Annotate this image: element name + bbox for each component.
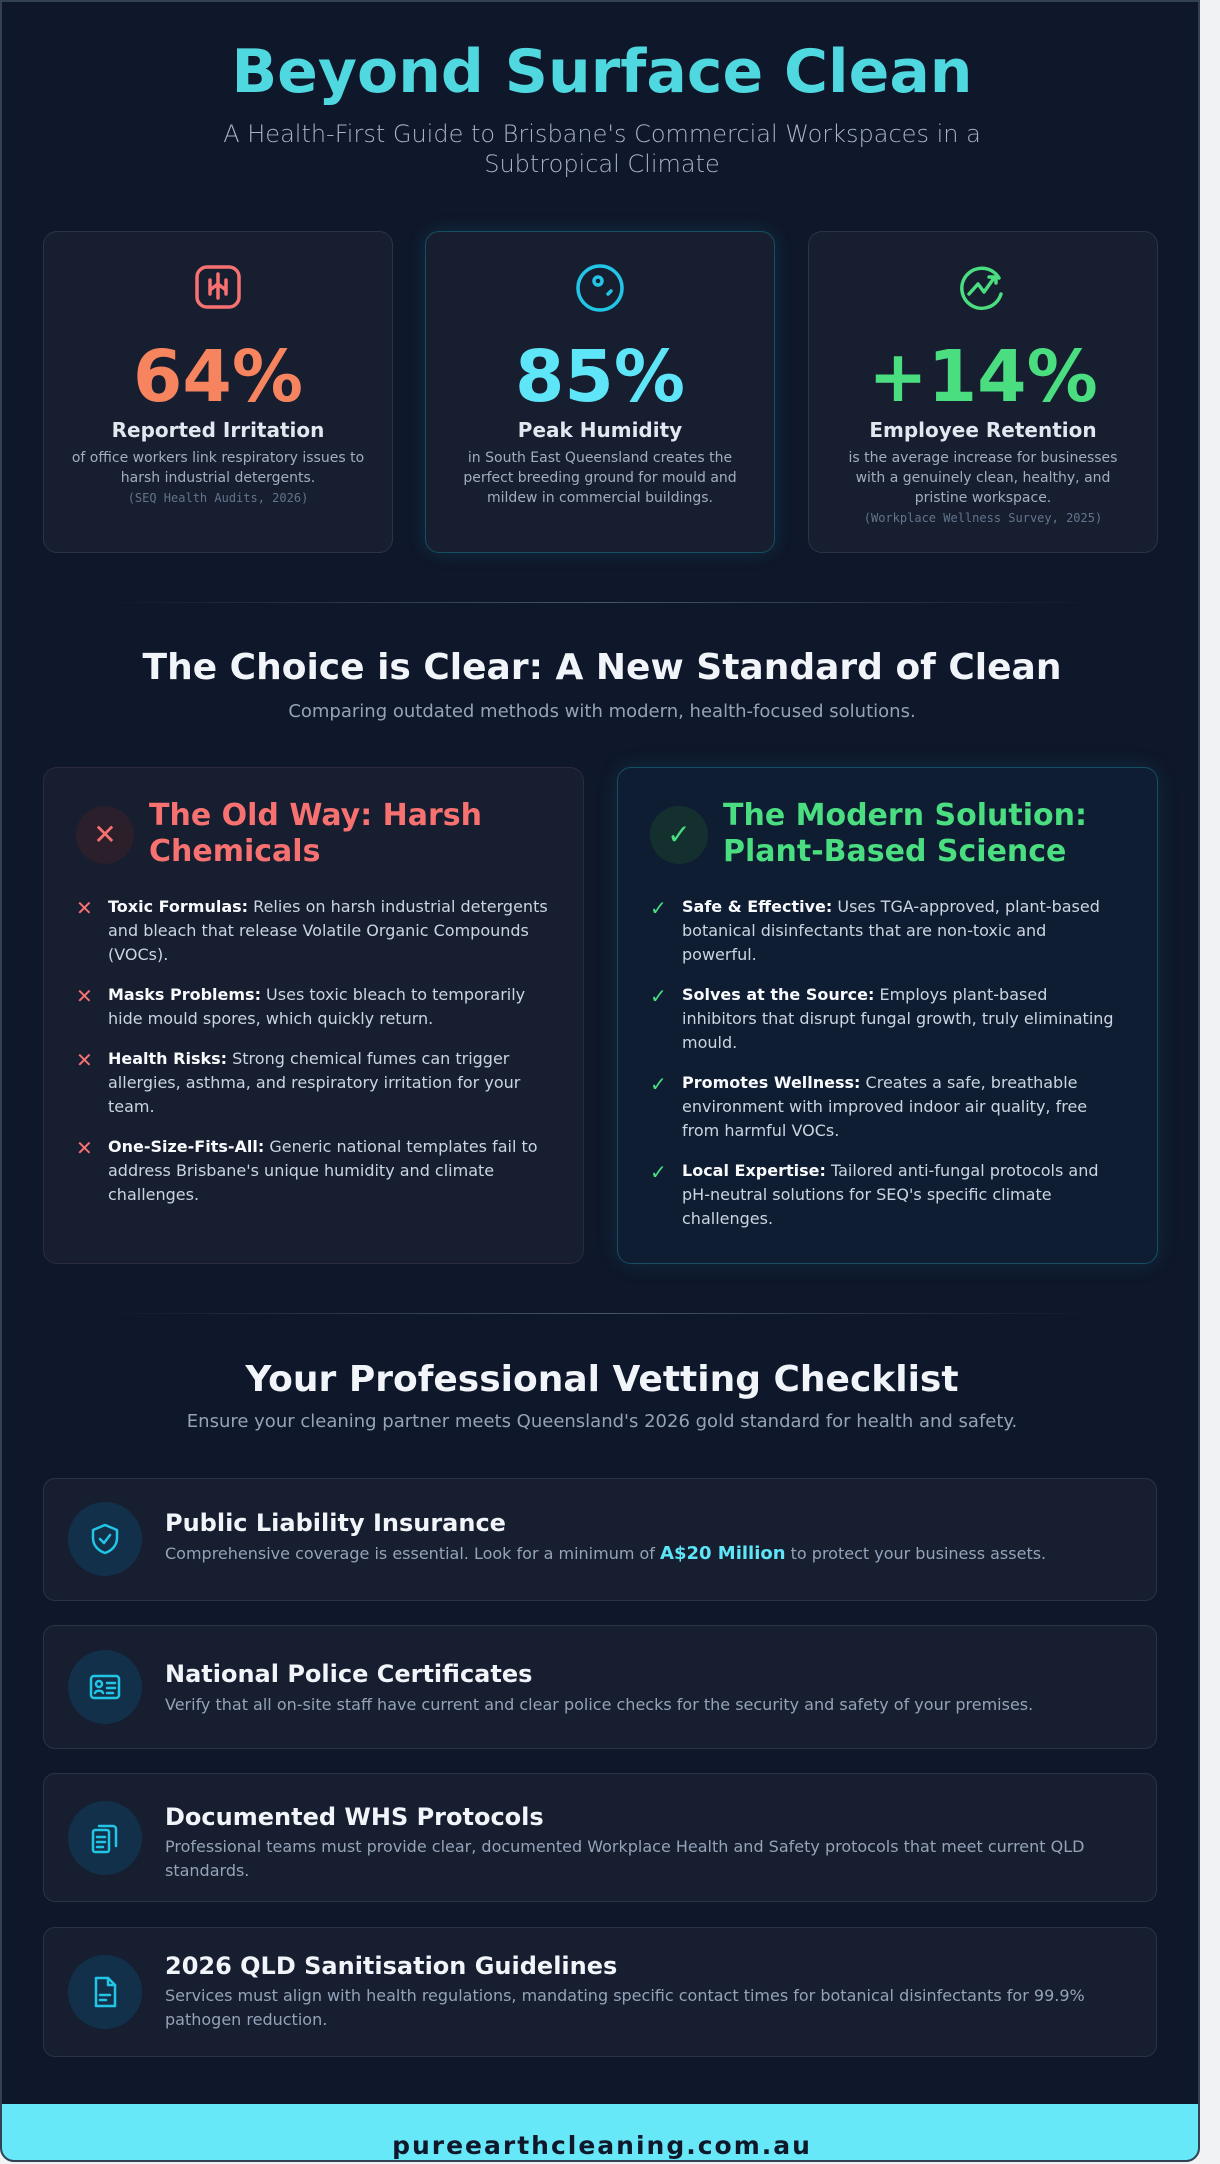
item: ✕ <box>76 984 93 1008</box>
item: Health Risks: Strong chemical fumes can trigger allergies, asthma, and respiratory irritation for your team. <box>108 1049 520 1116</box>
item: Safe & Effective: Uses TGA-approved, plant-based botanical disinfectants that are non-toxic and powerful. <box>682 897 1100 964</box>
old way title <box>149 798 482 869</box>
checklist: sanitisation <box>43 1927 1157 2057</box>
stat card: retention: +14% <box>868 335 1098 418</box>
item: Local Expertise: Tailored anti-fungal protocols and pH-neutral solutions for SEQ's specific climate challenges. <box>682 1161 1099 1228</box>
checklist: sanitisation: Services must align with health regulations, mandating specific contact times for botanical disinfectants for 99.9% pathogen reduction. <box>165 1986 1085 2029</box>
heading: choice: The Choice is Clear: A New Standard of Clean <box>143 647 1061 688</box>
stat card: humidity: 85% <box>515 335 685 418</box>
panel: old way <box>43 767 584 1264</box>
footer: pureearthcleaning.com.au <box>392 2131 812 2160</box>
modern title <box>723 798 1087 869</box>
checklist: police: National Police Certificates <box>165 1660 532 1688</box>
checklist: insurance <box>43 1478 1157 1601</box>
icon: clipboard <box>68 1801 142 1875</box>
icon: cross: ✕ <box>93 818 117 851</box>
item: Promotes Wellness: Creates a safe, breathable environment with improved indoor air quality, free from harmful VOCs. <box>682 1073 1087 1140</box>
panel: modern <box>617 767 1158 1264</box>
checklist: insurance: Comprehensive coverage is essential. Look for a minimum of A$20 Million to protect your business assets. <box>165 1543 1046 1564</box>
icon: lungs <box>195 265 241 309</box>
stat card: humidity: in South East Queensland creates the perfect breeding ground for mould and mildew in commercial buildings. <box>463 450 737 506</box>
item: ✓ <box>650 1072 667 1096</box>
stat card: irritation <box>43 231 393 553</box>
subheading: Ensure your cleaning partner meets Queensland's 2026 gold standard for health and safety. <box>187 1411 1017 1432</box>
item: Masks Problems: Uses toxic bleach to temporarily hide mould spores, which quickly return. <box>108 985 525 1028</box>
stat card: retention <box>808 231 1158 553</box>
stat card: irritation: of office workers link respiratory issues to harsh industrial detergents. <box>72 450 364 486</box>
stat card: irritation: Reported Irritation <box>112 418 324 442</box>
checklist: WHS: Documented WHS Protocols <box>165 1803 544 1831</box>
item: ✓ <box>650 896 667 920</box>
item: One-Size-Fits-All: Generic national templates fail to address Brisbane's unique humidity and climate challenges. <box>108 1137 538 1204</box>
icon: cross <box>76 806 134 864</box>
item: Solves at the Source: Employs plant-based <box>682 985 1047 1004</box>
modern title: Plant-Based Science <box>723 834 1066 869</box>
stat card: humidity <box>425 231 775 553</box>
item: ✓ <box>650 984 667 1008</box>
heading: checklist: Your Professional Vetting Checklist <box>245 1359 959 1400</box>
stat card: humidity: Peak Humidity <box>518 418 682 442</box>
item <box>650 984 1114 1052</box>
icon: gauge <box>576 264 624 312</box>
stat card: irritation: (SEQ Health Audits, 2026) <box>128 491 308 505</box>
icon: shield <box>68 1502 142 1576</box>
checklist: WHS <box>43 1773 1157 1902</box>
checklist: police <box>43 1625 1157 1749</box>
old way title: Chemicals <box>149 834 320 869</box>
item: mould. <box>682 1033 737 1052</box>
icon: check <box>650 806 708 864</box>
stat card: retention: is the average increase for businesses with a genuinely clean, healthy, and pristine workspace. <box>849 450 1117 506</box>
icon: growth <box>960 266 1003 310</box>
checklist: insurance: Public Liability Insurance <box>165 1509 506 1537</box>
stat card: irritation: 64% <box>133 335 303 418</box>
item: ✓ <box>650 1160 667 1184</box>
icon: id card <box>68 1650 142 1724</box>
icon: document <box>68 1955 142 2029</box>
item: ✕ <box>76 1048 93 1072</box>
stat card: retention: Employee Retention <box>869 418 1097 442</box>
checklist: sanitisation: 2026 QLD Sanitisation Guidelines <box>165 1952 617 1980</box>
subtitle: A Health-First Guide to Brisbane's Commercial Workspaces in a Subtropical Climate <box>223 120 981 178</box>
footer <box>2 2104 1202 2164</box>
item: inhibitors that disrupt fungal growth, truly eliminating <box>682 1009 1114 1028</box>
checklist: police: Verify that all on-site staff have current and clear police checks for the security and safety of your premises. <box>165 1695 1033 1714</box>
title: Beyond Surface Clean <box>231 37 973 107</box>
checklist: WHS: Professional teams must provide clear, documented Workplace Health and Safety protocols that meet current QLD standards. <box>165 1837 1084 1880</box>
modern title: The Modern Solution: <box>723 798 1087 833</box>
subheading: Comparing outdated methods with modern, health-focused solutions. <box>288 701 916 722</box>
icon: check: ✓ <box>667 818 691 851</box>
item: ✕ <box>76 896 93 920</box>
item: Toxic Formulas: Relies on harsh industrial detergents and bleach that release Volatile Organic Compounds (VOCs). <box>108 897 548 964</box>
old way title: The Old Way: Harsh <box>149 798 482 833</box>
item: ✕ <box>76 1136 93 1160</box>
stat card: retention: (Workplace Wellness Survey, 2025) <box>864 511 1102 525</box>
